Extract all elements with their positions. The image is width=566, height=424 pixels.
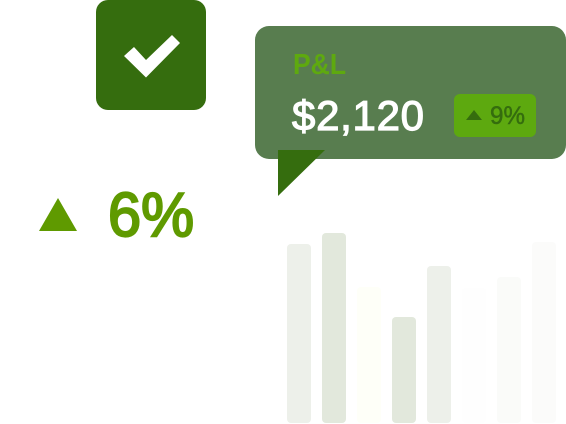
icon: up triangle — [39, 198, 77, 231]
callout label: P&L — [293, 49, 346, 81]
trend indicator — [39, 181, 194, 250]
badge percentage: 9% — [490, 102, 525, 130]
icon: check badge — [96, 0, 206, 110]
bar chart — [287, 233, 556, 423]
callout pointer — [278, 150, 325, 196]
change badge — [454, 94, 536, 137]
callout value: $2,120 — [292, 92, 424, 139]
trend percentage: 6% — [108, 181, 194, 250]
icon: badge up triangle — [466, 110, 482, 120]
callout: P&L — [255, 26, 566, 196]
